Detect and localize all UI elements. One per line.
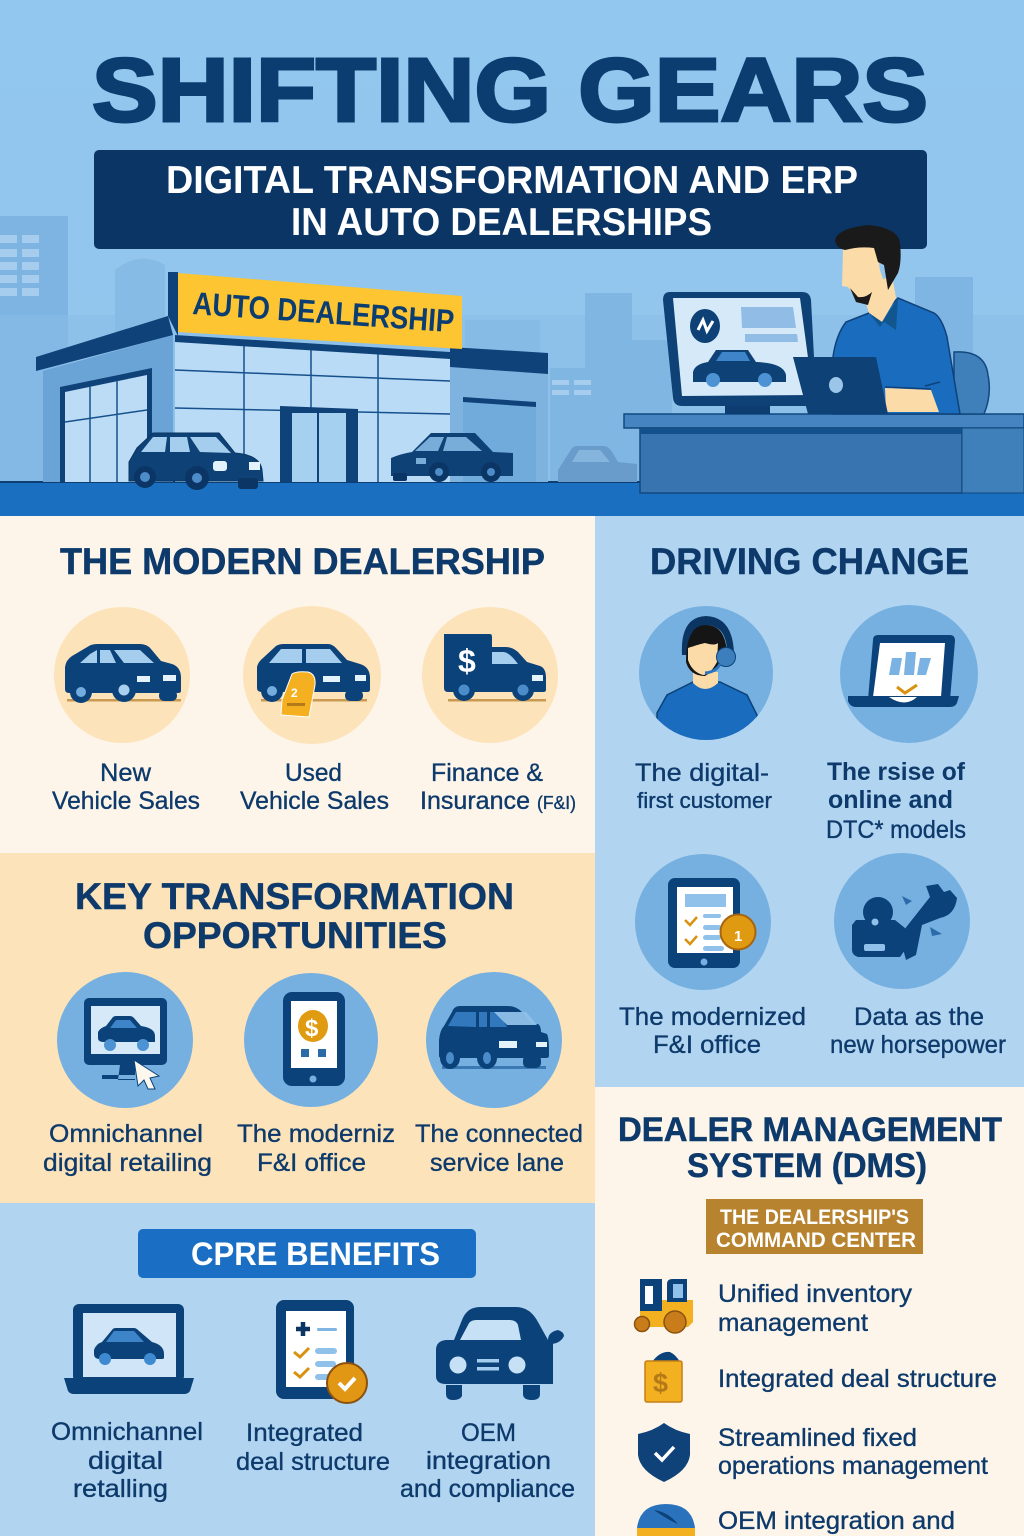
label: oem integration and compliance: OEM [461, 1419, 516, 1447]
text: integrated deal structure: Integrated deal structure [718, 1365, 997, 1393]
text: unified inventory management: Unified inventory [718, 1280, 913, 1308]
icon: finance truck [422, 607, 558, 743]
icon: online laptop [840, 605, 978, 743]
label: the modernized f&i office [237, 1120, 395, 1177]
label: integrated deal structure [236, 1419, 390, 1476]
heading: driving change: DRIVING CHANGE [650, 541, 969, 582]
text: streamlined fixed operations management: operations management [718, 1452, 988, 1480]
road [0, 481, 1024, 516]
label: the modernized f&i office: The moderniz [237, 1120, 395, 1148]
label: integrated deal structure: Integrated [246, 1419, 363, 1447]
label: data as the new horsepower [830, 1003, 1006, 1059]
heading: key transformation opportunities: OPPORTUNITIES [143, 915, 447, 956]
label: finance and insurance: Insurance [420, 787, 530, 815]
sign: auto dealership: AUTO DEALERSHIP [192, 285, 455, 339]
label: new vehicle sales: Vehicle Sales [52, 787, 200, 815]
label: the digital-first customer [635, 759, 772, 813]
icon: modernized f&i tablet: 1 [734, 928, 742, 945]
subtitle banner [94, 150, 927, 249]
subtitle banner: IN AUTO DEALERSHIPS [291, 201, 712, 244]
label: finance and insurance: Finance & [431, 759, 543, 787]
sign: auto dealership [178, 273, 462, 349]
panel: key transformation opportunities [0, 853, 595, 1203]
icon: omnichannel monitor [57, 972, 193, 1108]
title: SHIFTING GEARS [92, 41, 928, 141]
panel: the modern dealership [0, 516, 595, 853]
icon: dollar bag [645, 1352, 682, 1402]
heading: the modern dealership: THE MODERN DEALERSHIP [60, 541, 545, 582]
label: omnichannel digital retailing: Omnichannel [51, 1418, 203, 1446]
car: distant [558, 446, 637, 482]
text: oem integration and: OEM integration and [718, 1507, 955, 1535]
text: unified inventory management: management [718, 1309, 868, 1337]
heading: dealer management system: DEALER MANAGEMENT [618, 1111, 1002, 1149]
icon: deal checklist [276, 1300, 367, 1403]
icon: modernized f&i tablet [635, 854, 771, 990]
person at desk [833, 225, 960, 414]
icon: digital-first customer [639, 606, 773, 745]
icon: laptop with car [64, 1304, 194, 1394]
panel: cpre benefits [0, 1203, 595, 1536]
label: the modernized f&i office: The modernized [619, 1003, 806, 1031]
label: the connected service lane: The connected [415, 1120, 583, 1148]
label: the rise of online and dtc models [826, 758, 966, 844]
label: used vehicle sales: Vehicle Sales [240, 787, 389, 815]
icon: oem dome [637, 1504, 695, 1536]
text: streamlined fixed operations management [718, 1424, 988, 1480]
label: finance and insurance [420, 759, 576, 815]
label: data as the new horsepower: new horsepower [830, 1031, 1006, 1059]
icon: finance truck: $ [458, 643, 476, 679]
icon: data lock and wrench [834, 853, 970, 989]
heading: dealer management system [618, 1111, 1002, 1185]
label: new vehicle sales [52, 759, 200, 815]
badge: command center [706, 1199, 923, 1254]
desk [624, 414, 1024, 493]
heading: key transformation opportunities [75, 876, 514, 956]
label: omnichannel digital retailing: digital [88, 1447, 163, 1475]
panel: driving change [619, 548, 1006, 1058]
label: the modernized f&i office: F&I office [257, 1149, 366, 1177]
label: the rise of online and dtc models: online and [828, 786, 953, 814]
hero banner panel [0, 0, 1024, 516]
label: the digital-first customer: first customer [637, 788, 772, 813]
icon: new vehicle car [54, 607, 190, 743]
label: used vehicle sales [240, 759, 389, 815]
label: the modernized f&i office [619, 1003, 806, 1059]
label: oem integration and compliance: and compliance [400, 1475, 575, 1503]
heading: dealer management system: SYSTEM (DMS) [687, 1147, 927, 1185]
heading: key transformation opportunities: KEY TRANSFORMATION [75, 876, 514, 917]
label: new vehicle sales: New [100, 759, 152, 787]
label: omnichannel digital retailing: digital retailing [43, 1149, 212, 1177]
background skyline [0, 216, 1024, 482]
badge: command center: COMMAND CENTER [716, 1229, 916, 1252]
icon: connected suv [426, 972, 562, 1108]
car: front left [129, 433, 263, 490]
label: the digital-first customer: The digital- [635, 759, 769, 787]
panel: dealer management system [595, 1087, 1024, 1536]
label: the modernized f&i office: F&I office [653, 1031, 761, 1059]
icon: phone with dollar [244, 973, 378, 1107]
label: omnichannel digital retailing [51, 1418, 203, 1503]
label: the connected service lane [415, 1120, 583, 1177]
subtitle banner: DIGITAL TRANSFORMATION AND ERP [166, 159, 858, 202]
label: integrated deal structure: deal structure [236, 1448, 390, 1476]
icon: used vehicle car with tag: 2 [291, 686, 298, 700]
heading button: cpre benefits: CPRE BENEFITS [191, 1236, 440, 1272]
text: streamlined fixed operations management: Streamlined fixed [718, 1424, 917, 1452]
text: unified inventory management [718, 1280, 913, 1337]
label: omnichannel digital retailing: Omnichannel [49, 1120, 203, 1148]
label: used vehicle sales: Used [285, 759, 342, 787]
icon: dollar bag: $ [653, 1368, 668, 1398]
label: oem integration and compliance [400, 1419, 575, 1503]
icon: phone with dollar: $ [305, 1015, 319, 1042]
label: omnichannel digital retailing: retalling [73, 1475, 168, 1503]
icon: forklift [634, 1279, 693, 1333]
heading button: cpre benefits [138, 1229, 476, 1278]
icon: car front [436, 1307, 564, 1400]
icon: shield [638, 1423, 690, 1482]
label: omnichannel digital retailing [43, 1120, 212, 1177]
label: the connected service lane: service lane [430, 1149, 564, 1177]
badge: command center: THE DEALERSHIP'S [720, 1206, 909, 1229]
monitor [663, 292, 816, 414]
label: data as the new horsepower: Data as the [854, 1003, 984, 1031]
label: finance and insurance: (F&I) [537, 793, 576, 813]
dealership building [36, 272, 548, 482]
icon: used vehicle car with tag [243, 606, 381, 744]
chair [954, 352, 989, 414]
label: the rise of online and dtc models: DTC* models [826, 816, 966, 844]
car: front right [391, 433, 513, 482]
laptop [793, 357, 888, 414]
label: oem integration and compliance: integration [426, 1447, 551, 1475]
label: the rise of online and dtc models: The rsise of [827, 758, 966, 786]
